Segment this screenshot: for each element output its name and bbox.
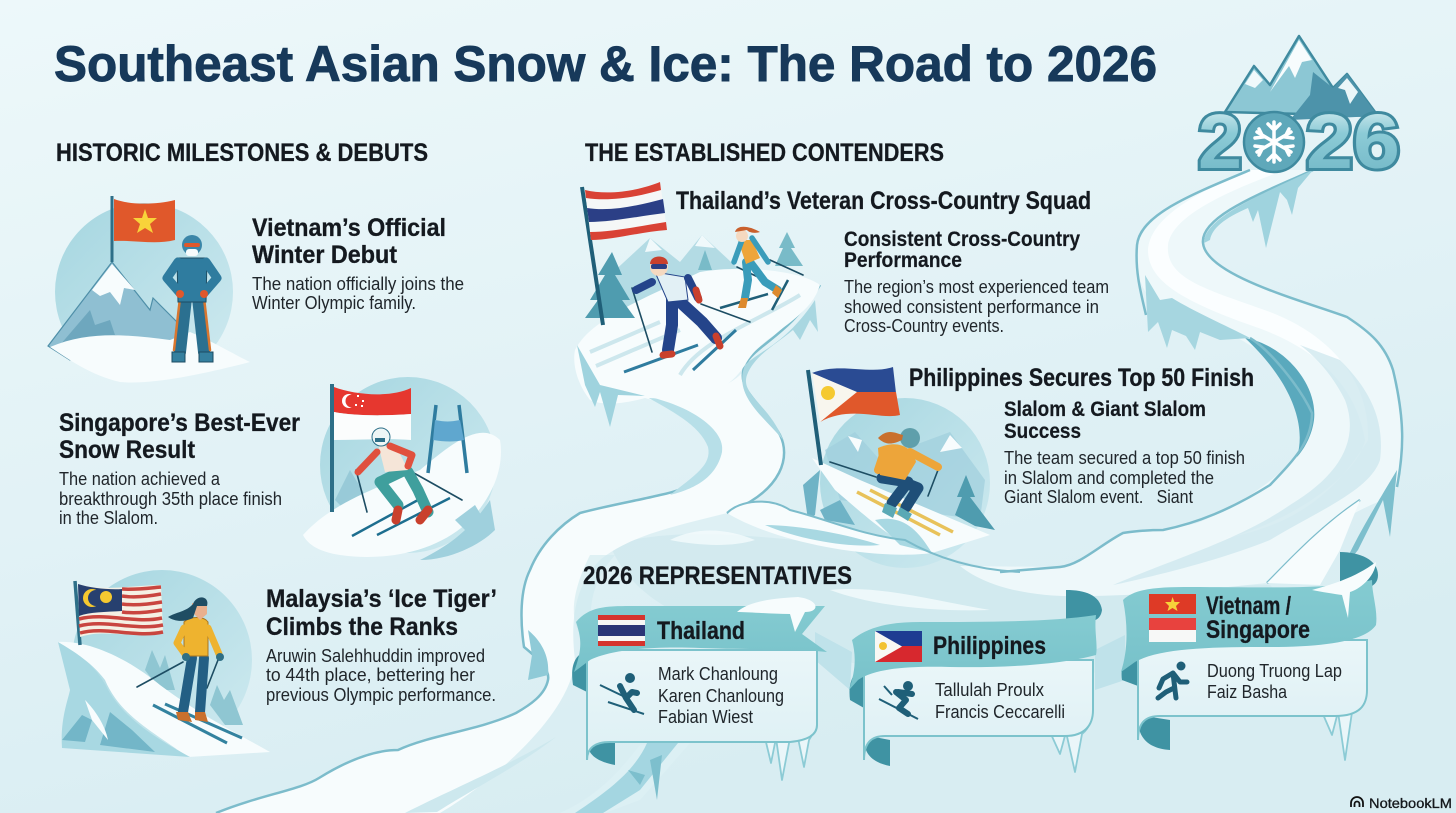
panel: Philippines top 50 <box>727 364 1254 572</box>
section heading: 2026 representatives: 2026 REPRESENTATIVES <box>583 562 852 590</box>
skier <box>830 428 953 535</box>
panel: Thailand cross-country <box>574 182 1109 427</box>
heading: Singapore's Best-Ever Snow Result <box>59 409 300 464</box>
slalom gate <box>428 405 467 473</box>
subheading: Slalom & Giant Slalom Success: Slalom & Giant Slalom <box>1004 397 1206 421</box>
flag: Philippines <box>875 631 922 662</box>
flag: Vietnam <box>1149 594 1196 614</box>
subheading: Consistent Cross-Country Performance: Consistent Cross-Country <box>844 227 1080 251</box>
ribbon body with curls <box>849 590 1102 772</box>
illustration: Thai cross-country skiers <box>574 182 820 427</box>
ribbon connectors <box>815 632 1125 690</box>
female skier <box>720 227 803 310</box>
athlete names <box>658 663 784 727</box>
description: Philippines: Giant Slalom event. Siant <box>1004 487 1193 507</box>
description: Malaysia: to 44th place, bettering her <box>266 665 475 685</box>
male skier <box>624 256 750 372</box>
title: Southeast Asian Snow & Ice: The Road to 2026 <box>54 36 1157 92</box>
athlete <box>167 235 217 362</box>
description: Singapore <box>59 469 282 528</box>
flag: Thailand <box>598 615 645 646</box>
illustration: Vietnam athlete on mountain <box>48 196 250 383</box>
country name: Vietnam / <box>1206 592 1291 620</box>
athlete names: Karen Chanloung <box>658 685 784 706</box>
heading: Malaysia's Ice Tiger <box>266 585 497 641</box>
country name: Singapore <box>1206 616 1310 644</box>
description: Philippines: The team secured a top 50 finish <box>1004 448 1245 468</box>
logo numerals <box>1198 99 1400 185</box>
2026 mountain logo <box>1198 36 1400 185</box>
athlete names <box>935 679 1065 722</box>
subheading: Consistent Cross-Country Performance <box>844 227 1080 272</box>
description: Vietnam <box>252 274 464 313</box>
description: Vietnam: Winter Olympic family. <box>252 293 416 313</box>
athlete names: Tallulah Proulx <box>935 679 1045 700</box>
country name: Thailand <box>657 617 745 645</box>
section heading: historic milestones: HISTORIC MILESTONES & DEBUTS <box>56 139 428 167</box>
athlete names: Duong Truong Lap <box>1207 660 1342 681</box>
NotebookLM watermark: NotebookLM <box>1369 795 1452 811</box>
illustration: Singapore skier <box>303 377 501 560</box>
skier <box>137 597 242 743</box>
icon: skier <box>879 681 918 719</box>
illustration: Malaysia skier <box>58 570 270 757</box>
flag: Singapore <box>332 384 411 512</box>
ribbon body with curls <box>1121 552 1378 760</box>
description: Philippines <box>1004 448 1245 507</box>
athlete names: Fabian Wiest <box>658 706 753 727</box>
description: Vietnam: The nation officially joins the <box>252 274 464 294</box>
subheading: Consistent Cross-Country Performance: Performance <box>844 248 962 272</box>
icon: skier <box>600 673 644 714</box>
country name: Philippines <box>933 632 1046 660</box>
panel: Vietnam debut <box>48 196 464 383</box>
banner: Vietnam / Singapore <box>1121 552 1378 760</box>
flag: Philippines <box>808 367 900 465</box>
flag: Malaysia <box>75 581 163 645</box>
heading: Vietnam's Official Winter Debut <box>252 214 446 269</box>
heading: Philippines Secures Top 50 Finish: Philippines Secures Top 50 Finish <box>909 364 1254 392</box>
heading: Malaysia's Ice Tiger: Climbs the Ranks <box>266 613 458 641</box>
flag: Vietnam <box>112 196 175 262</box>
description: Singapore: The nation achieved a <box>59 469 221 489</box>
heading: Vietnam's Official Winter Debut: Winter Debut <box>252 241 398 269</box>
description: Philippines: in Slalom and completed the <box>1004 468 1214 488</box>
snow trail winding from the bottom left up to the 2026 logo <box>216 170 1402 813</box>
description: Thailand <box>844 277 1109 336</box>
heading: Malaysia's Ice Tiger: Malaysia’s ‘Ice Tiger’ <box>266 585 497 613</box>
description: Thailand: Cross-Country events. <box>844 316 1004 336</box>
icon: runner <box>1158 662 1187 698</box>
ribbon body with curls <box>572 597 827 780</box>
description: Singapore: in the Slalom. <box>59 508 158 528</box>
heading: Singapore's Best-Ever Snow Result: Singapore’s Best-Ever <box>59 409 300 437</box>
description: Thailand: showed consistent performance in <box>844 297 1099 317</box>
icon: snowflake medallion <box>1244 112 1304 172</box>
athlete names: Mark Chanloung <box>658 663 778 684</box>
heading: Singapore's Best-Ever Snow Result: Snow Result <box>59 436 196 464</box>
description: Malaysia: Aruwin Salehhuddin improved <box>266 646 485 666</box>
description: Singapore: breakthrough 35th place finish <box>59 489 282 509</box>
subheading: Slalom & Giant Slalom Success <box>1004 397 1206 443</box>
skier <box>352 428 462 536</box>
banner: Thailand <box>572 597 827 780</box>
logo numerals: 26 <box>1306 99 1400 185</box>
description: Thailand: The region’s most experienced team <box>844 277 1109 297</box>
athlete names: Faiz Basha <box>1207 681 1288 702</box>
heading: Vietnam's Official Winter Debut: Vietnam’s Official <box>252 214 446 242</box>
flag: Singapore <box>1149 618 1196 642</box>
description: Malaysia: previous Olympic performance. <box>266 685 496 705</box>
section heading: established contenders: THE ESTABLISHED CONTENDERS <box>585 139 944 167</box>
panel: Singapore result <box>59 377 501 560</box>
banner: Philippines <box>849 590 1102 772</box>
logo numerals: 2 <box>1198 99 1242 185</box>
illustration: Philippine skier <box>727 367 1020 572</box>
athlete names <box>1207 660 1342 702</box>
logo mountains <box>1225 36 1378 120</box>
description: Malaysia <box>266 646 496 705</box>
panel: Malaysia <box>58 570 497 757</box>
athlete names: Francis Ceccarelli <box>935 701 1065 722</box>
heading: Thailand's Veteran Cross-Country Squad: Thailand’s Veteran Cross-Country Squad <box>676 187 1091 215</box>
country name <box>1206 592 1310 644</box>
subheading: Slalom & Giant Slalom Success: Success <box>1004 419 1081 443</box>
flag: Thailand <box>582 182 667 325</box>
